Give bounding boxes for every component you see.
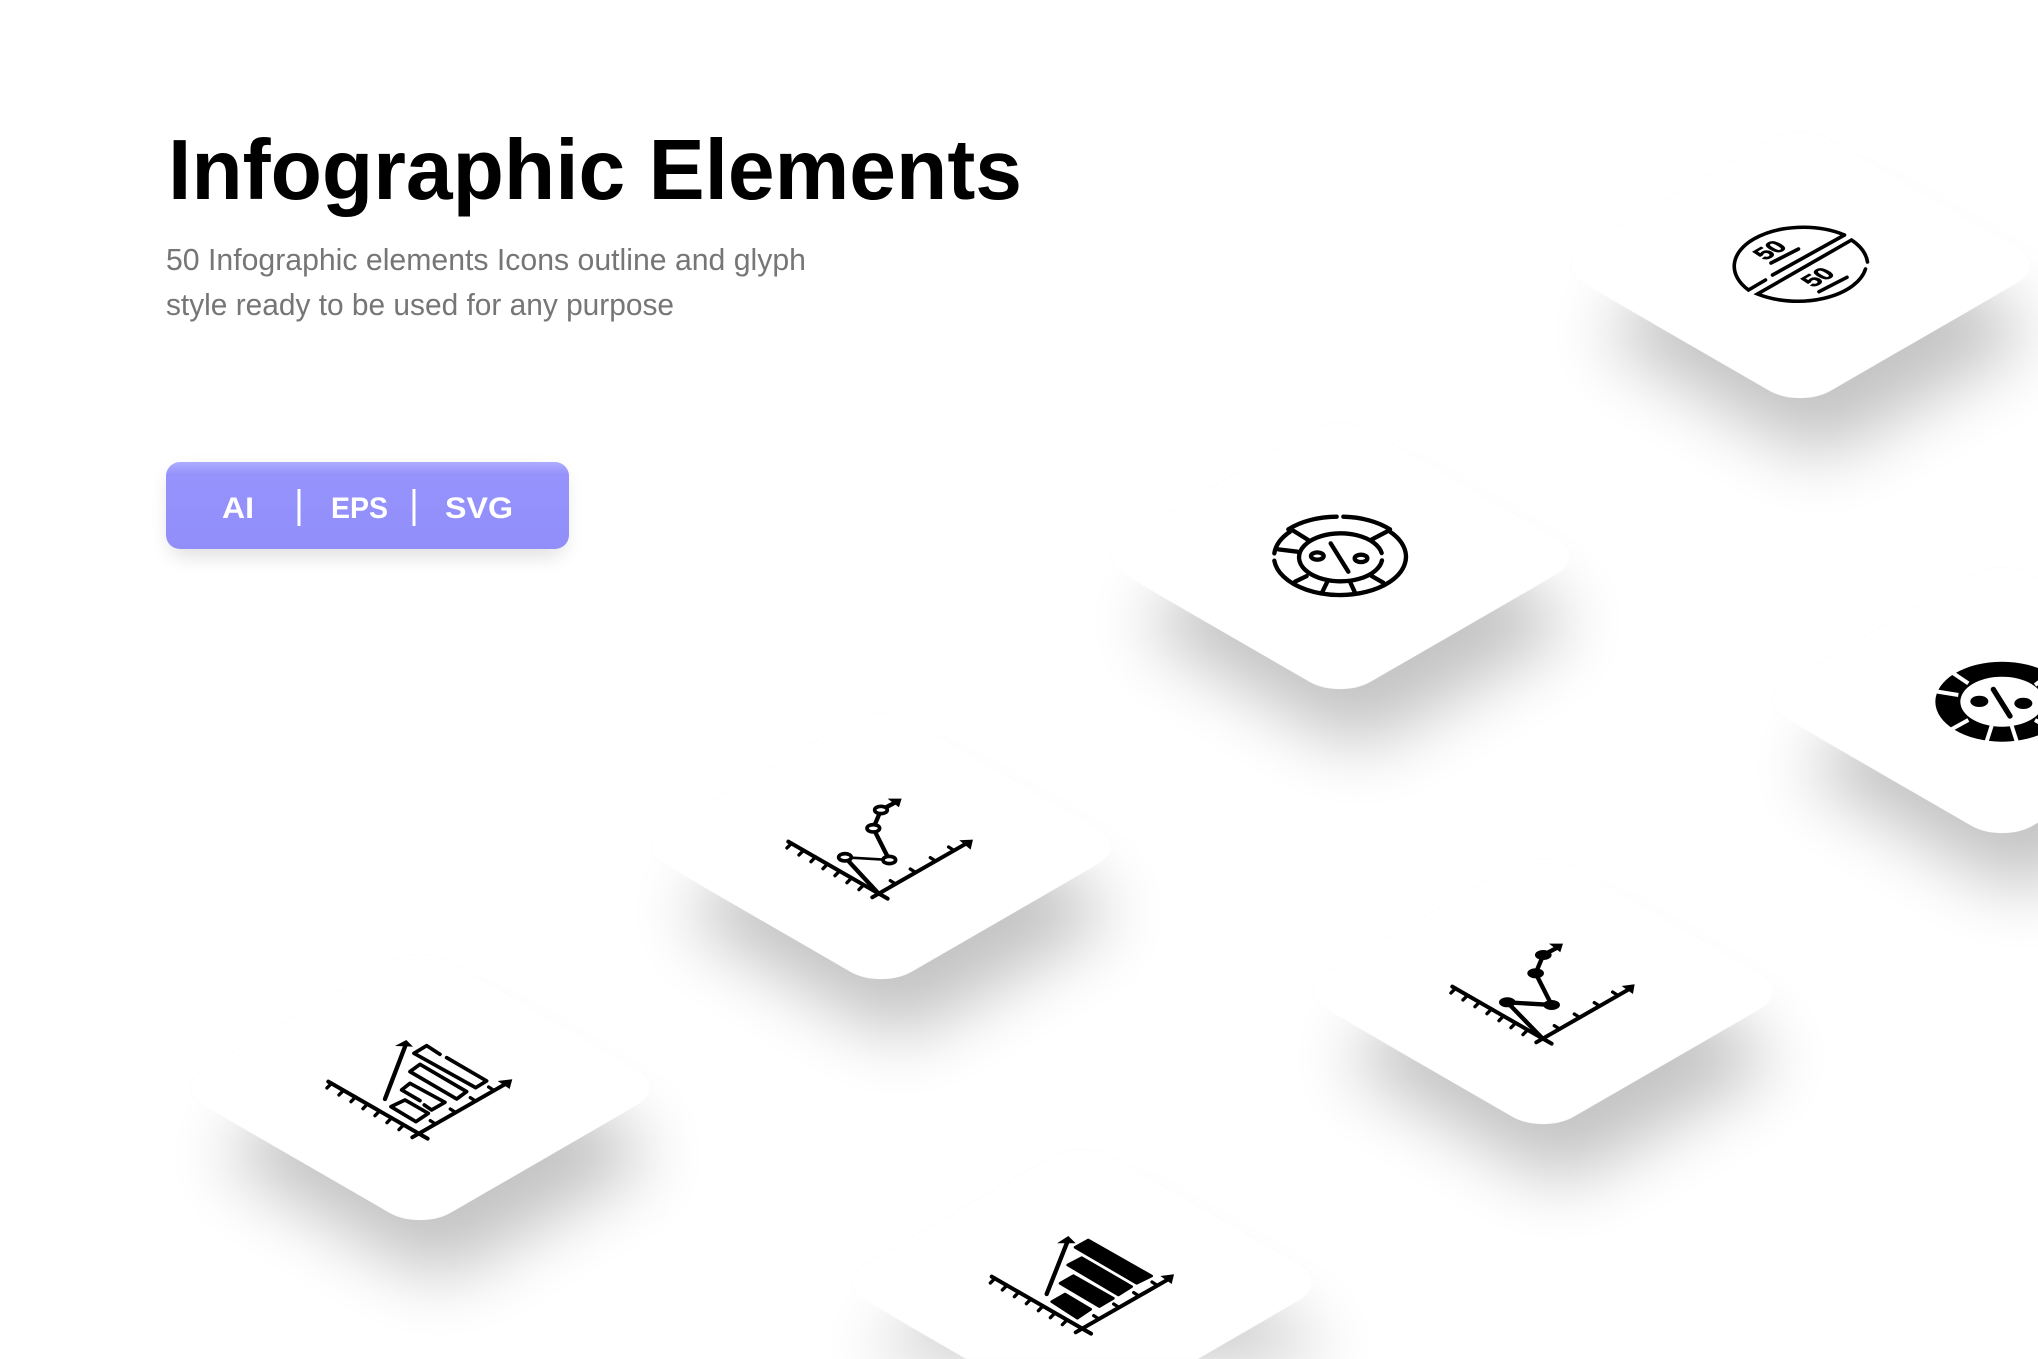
subtitle text: style ready to be used for any purpose <box>166 287 674 322</box>
icon: percent ring glyph <box>1934 662 2038 743</box>
format badge: AI <box>222 492 254 525</box>
card: percent glyph <box>1754 557 2038 897</box>
icon: percent ring outline <box>1274 517 1406 595</box>
subtitle text <box>166 242 806 322</box>
card: percent outline <box>1092 413 1588 753</box>
icon: bar chart glyph <box>990 1236 1174 1334</box>
card: bar chart outline <box>172 944 668 1284</box>
icon: line chart outline <box>787 799 973 899</box>
format badge <box>166 462 569 556</box>
title: Infographic Elements <box>168 123 1022 218</box>
icon: 50/50 circle <box>1734 227 1868 301</box>
card: bar chart glyph <box>852 1149 1322 1359</box>
icon: bar chart outline <box>327 1040 512 1139</box>
subtitle text: 50 Infographic elements Icons outline and glyph <box>166 242 806 277</box>
format badge: SVG <box>445 492 513 525</box>
icon: 50/50 circle: 50 <box>1747 237 1794 264</box>
card: line chart outline <box>633 703 1129 1043</box>
card: 50/50 outline <box>1552 122 2038 462</box>
icon: 50/50 circle: 50 <box>1795 264 1842 291</box>
card: line chart glyph <box>1295 848 1791 1188</box>
format badge: EPS <box>331 492 388 525</box>
icon: line chart glyph <box>1451 944 1635 1044</box>
